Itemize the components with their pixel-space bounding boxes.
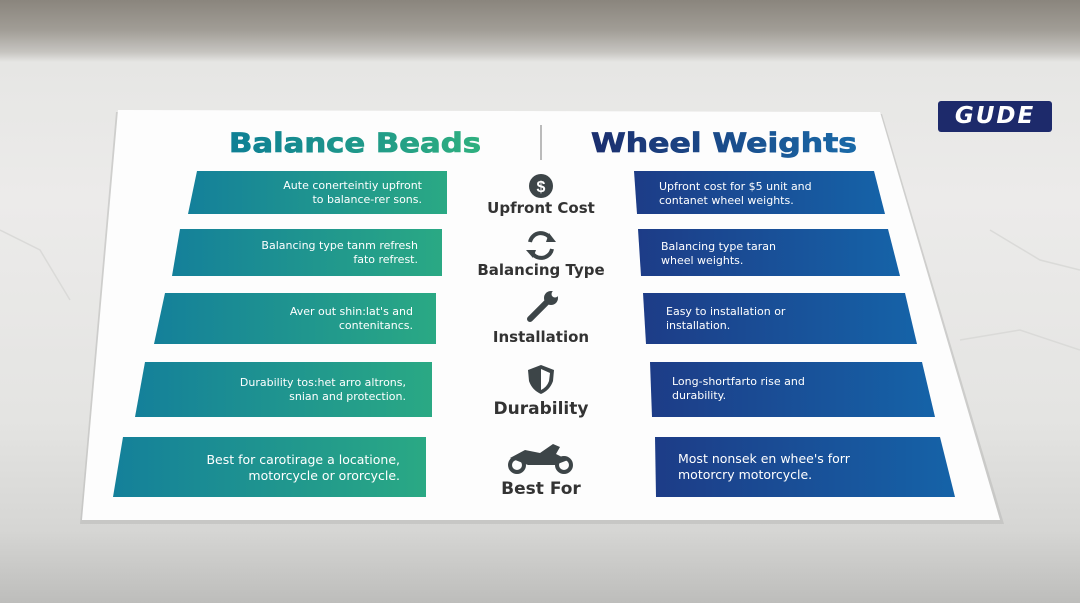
text: Installation	[493, 328, 589, 346]
text: snian and protection.	[289, 390, 406, 403]
logo	[938, 101, 1052, 132]
text: Easy to installation or	[666, 305, 785, 318]
text: Balancing Type	[477, 261, 605, 279]
text: Aver out shin:lat's and	[290, 305, 413, 318]
text: contenitancs.	[339, 319, 413, 332]
left texts: to balance-rer sons.	[312, 193, 422, 206]
right texts: contanet wheel weights.	[659, 194, 794, 207]
text: installation.	[666, 319, 730, 332]
text: Best for carotirage a locatione,	[206, 452, 400, 467]
text: motorcry motorcycle.	[678, 467, 812, 482]
right bars	[634, 171, 955, 497]
logo: GUDE	[955, 103, 1035, 129]
text: Most nonsek en whee's forr	[678, 451, 850, 466]
text: Durability tos:het arro altrons,	[240, 376, 406, 389]
text: motorcycle or ororcycle.	[248, 468, 400, 483]
left texts: Aute conerteintiy upfront	[283, 179, 422, 192]
right texts: Upfront cost for $5 unit and	[659, 180, 812, 193]
text: Balancing type tanm refresh	[261, 239, 418, 252]
right texts	[659, 180, 812, 207]
text: Best For	[501, 479, 581, 499]
titles: Balance Beads	[229, 128, 481, 159]
text: Long-shortfarto rise and	[672, 375, 805, 388]
text: fato refrest.	[353, 253, 418, 266]
left bars	[113, 171, 447, 497]
labels: Upfront Cost	[487, 199, 595, 217]
icons: $	[537, 179, 546, 196]
left texts	[283, 179, 422, 206]
card: Wheel Weights	[591, 128, 857, 159]
text: Balancing type taran	[661, 240, 776, 253]
text: Durability	[494, 399, 588, 419]
text: wheel weights.	[661, 254, 743, 267]
text: durability.	[672, 389, 726, 402]
